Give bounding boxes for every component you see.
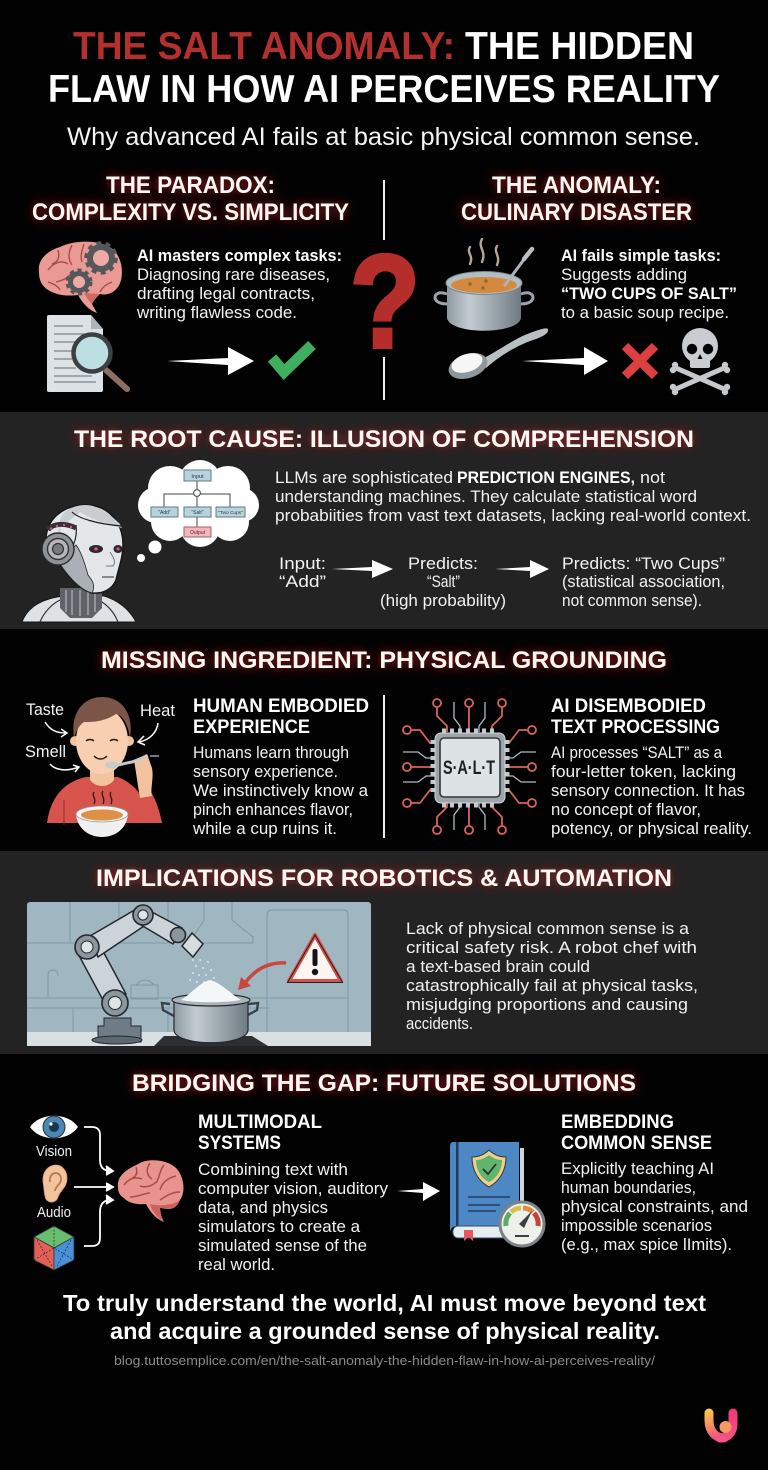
- text: ai disembodied: AI processes “SALT” as a: [551, 744, 723, 762]
- text: safety risk: accidents.: [406, 1015, 473, 1033]
- text: ai masters complex tasks: [136, 247, 342, 322]
- text: embedding common sense: Explicitly teaching AI: [561, 1160, 714, 1178]
- text: ai disembodied: AI DISEMBODIED: [551, 696, 706, 717]
- panel: anomaly: [435, 172, 737, 395]
- panel: implications: [0, 851, 768, 1054]
- text: multimodal systems: data, and physics: [198, 1199, 328, 1217]
- icon: skull and crossbones: [670, 328, 730, 395]
- text: prediction engines: LLMs are sophisticated: [275, 469, 453, 487]
- illustration: robot arm over salted pot: [27, 902, 371, 1046]
- flow: input: “Add”: [279, 573, 326, 591]
- heading: the paradox: COMPLEXITY VS. SIMPLICITY: [32, 199, 349, 226]
- conclusion: To truly understand the world, AI must move beyond text: [63, 1290, 706, 1316]
- text: multimodal systems: computer vision, auditory: [198, 1180, 389, 1198]
- heading: the anomaly: THE ANOMALY:: [492, 172, 661, 199]
- text: ai disembodied: sensory connection. It has: [551, 782, 745, 800]
- flow: predicts salt: Predicts:: [408, 555, 478, 573]
- text: prediction engines: not: [640, 469, 665, 487]
- flow: input: Input:: [279, 555, 326, 573]
- icon: brain with gears: [39, 242, 122, 313]
- text: ai fails simple tasks: AI fails simple tasks:: [561, 247, 721, 265]
- text: multimodal systems: Combining text with: [198, 1161, 348, 1179]
- label: audio: Audio: [37, 1205, 71, 1221]
- heading: the anomaly: [461, 172, 692, 226]
- icon: red cross: [625, 346, 655, 376]
- label: smell: Smell: [25, 743, 66, 761]
- text: ai masters complex tasks: drafting legal contracts,: [137, 285, 315, 303]
- arrow: masters to check: [167, 347, 254, 375]
- text: multimodal systems: simulated sense of the: [198, 1237, 367, 1255]
- label: taste: Taste: [26, 701, 64, 719]
- icon: document with magnifier: [47, 315, 127, 392]
- arrows: senses: [45, 722, 158, 772]
- text: human embodied: [192, 696, 369, 838]
- heading: the paradox: THE PARADOX:: [106, 172, 275, 199]
- text: human embodied: Humans learn through: [193, 744, 349, 762]
- panel: missing ingredient: [25, 647, 752, 838]
- text: embedding common sense: COMMON SENSE: [561, 1133, 712, 1154]
- text: ai fails simple tasks: [561, 247, 737, 322]
- arrow: input to salt: [332, 560, 393, 578]
- flow: predicts two cups: [562, 555, 725, 610]
- icon: question mark: ?: [350, 228, 420, 375]
- text: multimodal systems: real world.: [198, 1256, 275, 1274]
- text: embedding common sense: impossible scenarios: [561, 1217, 712, 1235]
- text: human embodied: pinch enhances flavor,: [193, 801, 353, 819]
- icon: soup pot: [435, 239, 533, 331]
- flow: predicts salt: [380, 555, 506, 610]
- text: embedding common sense: human boundaries,: [561, 1179, 696, 1197]
- text: multimodal systems: MULTIMODAL: [198, 1112, 322, 1133]
- icon: thought cloud with tree diagram: "Two Cups": [218, 510, 243, 516]
- icon: logo: [709, 1413, 733, 1438]
- subtitle: Why advanced AI fails at basic physical common sense.: [67, 123, 700, 151]
- text: ai disembodied: TEXT PROCESSING: [551, 717, 720, 738]
- divider: [383, 180, 385, 400]
- text: ai disembodied: four-letter token, lacking: [551, 763, 736, 781]
- text: ai masters complex tasks: Diagnosing rare diseases,: [137, 266, 330, 284]
- icon: eye: [30, 1116, 78, 1138]
- conclusion: and acquire a grounded sense of physical reality.: [110, 1318, 660, 1344]
- text: ai fails simple tasks: Suggests adding: [561, 266, 687, 284]
- heading: implications: IMPLICATIONS FOR ROBOTICS & AUTOMATION: [96, 865, 672, 892]
- text: embedding common sense: (e.g., max spice lImits).: [561, 1236, 732, 1254]
- flow: predicts two cups: Predicts: “Two Cups”: [562, 555, 725, 573]
- heading: missing ingredient: MISSING INGREDIENT: PHYSICAL GROUNDING: [101, 647, 667, 674]
- text: prediction engines: probabiities from vast text datasets, lacking real-world context.: [275, 507, 751, 525]
- panel: future solutions: [30, 1070, 748, 1274]
- title: [48, 25, 720, 111]
- flow: predicts two cups: not common sense).: [562, 592, 702, 610]
- text: ai disembodied: no concept of flavor,: [551, 801, 701, 819]
- conclusion: [63, 1290, 706, 1344]
- heading: the anomaly: CULINARY DISASTER: [461, 199, 692, 226]
- icon: brain: [118, 1160, 183, 1222]
- text: multimodal systems: simulators to create a: [198, 1218, 361, 1236]
- flow: predicts salt: “Salt”: [427, 573, 460, 591]
- icon: physics cube: [34, 1226, 74, 1270]
- icon: thought cloud with tree diagram: Output: [190, 530, 206, 536]
- icon: salt chip: S·A·L·T: [443, 758, 495, 779]
- icon: person tasting soup: [47, 697, 162, 837]
- arrow: systems to book: [397, 1182, 440, 1201]
- text: multimodal systems: SYSTEMS: [198, 1133, 281, 1154]
- icon: green check: [272, 345, 312, 372]
- divider: [383, 695, 385, 838]
- panel: paradox: [32, 172, 349, 392]
- text: human embodied: while a cup ruins it.: [192, 820, 337, 838]
- title: THE SALT ANOMALY:: [73, 25, 455, 68]
- icon: thought cloud with tree diagram: Input: [191, 474, 204, 480]
- icon: thought cloud with tree diagram: "Add": [158, 510, 171, 516]
- text: prediction engines: understanding machines. They calculate statistical word: [275, 488, 697, 506]
- text: human embodied: We instinctively know a: [193, 782, 369, 800]
- flow: predicts salt: (high probability): [380, 592, 506, 610]
- icon: spoon of salt: [445, 328, 548, 384]
- text: ai fails simple tasks: “TWO CUPS OF SALT”: [561, 285, 737, 303]
- text: ai disembodied: [551, 696, 752, 838]
- text: safety risk: [406, 920, 698, 1033]
- text: embedding common sense: [561, 1112, 748, 1254]
- arrows: inputs to brain: [74, 1127, 113, 1246]
- title: FLAW IN HOW AI PERCEIVES REALITY: [48, 68, 720, 111]
- arrow: salt to two cups: [495, 560, 549, 578]
- arrow: fails to cross: [522, 347, 608, 375]
- text: embedding common sense: EMBEDDING: [561, 1112, 674, 1133]
- text: human embodied: sensory experience.: [193, 763, 338, 781]
- icon: thought cloud with tree diagram: "Salt": [191, 510, 204, 516]
- title: THE HIDDEN: [465, 25, 694, 68]
- label: vision: Vision: [36, 1144, 72, 1160]
- text: ai masters complex tasks: AI masters complex tasks:: [137, 247, 342, 265]
- heading: bridging the gap: BRIDGING THE GAP: FUTURE SOLUTIONS: [132, 1070, 636, 1097]
- flow: input: [279, 555, 326, 591]
- text: safety risk: critical safety risk. A robot chef with: [406, 939, 697, 957]
- icon: rulebook with shield and gauge: [450, 1142, 544, 1246]
- text: embedding common sense: physical constraints, and: [561, 1198, 748, 1216]
- label: heat: Heat: [140, 702, 175, 720]
- text: multimodal systems: [198, 1112, 389, 1274]
- text: safety risk: Lack of physical common sense is a: [406, 920, 690, 938]
- source url: blog.tuttosemplice.com/en/the-salt-anomaly-the-hidden-flaw-in-how-ai-perceives-reality/: [114, 1354, 656, 1368]
- heading: root cause: THE ROOT CAUSE: ILLUSION OF COMPREHENSION: [74, 426, 694, 453]
- text: prediction engines: PREDICTION ENGINES,: [457, 469, 635, 487]
- text: human embodied: HUMAN EMBODIED: [193, 696, 369, 717]
- panel: root cause: [0, 412, 768, 629]
- icon: robot: [22, 505, 136, 622]
- text: ai fails simple tasks: to a basic soup recipe.: [561, 304, 729, 322]
- icon: salt chip: [403, 699, 536, 834]
- icon: thought cloud with tree diagram: [137, 460, 259, 562]
- text: safety risk: a text-based brain could: [406, 958, 590, 976]
- text: safety risk: catastrophically fail at physical tasks,: [406, 977, 698, 995]
- icon: ear: [43, 1165, 67, 1202]
- text: human embodied: EXPERIENCE: [193, 717, 310, 738]
- text: prediction engines: [275, 469, 751, 525]
- text: safety risk: misjudging proportions and causing: [406, 996, 688, 1014]
- text: ai masters complex tasks: writing flawless code.: [136, 304, 297, 322]
- flow: predicts two cups: (statistical association,: [562, 573, 725, 591]
- text: ai disembodied: potency, or physical reality.: [551, 820, 752, 838]
- heading: the paradox: [32, 172, 349, 226]
